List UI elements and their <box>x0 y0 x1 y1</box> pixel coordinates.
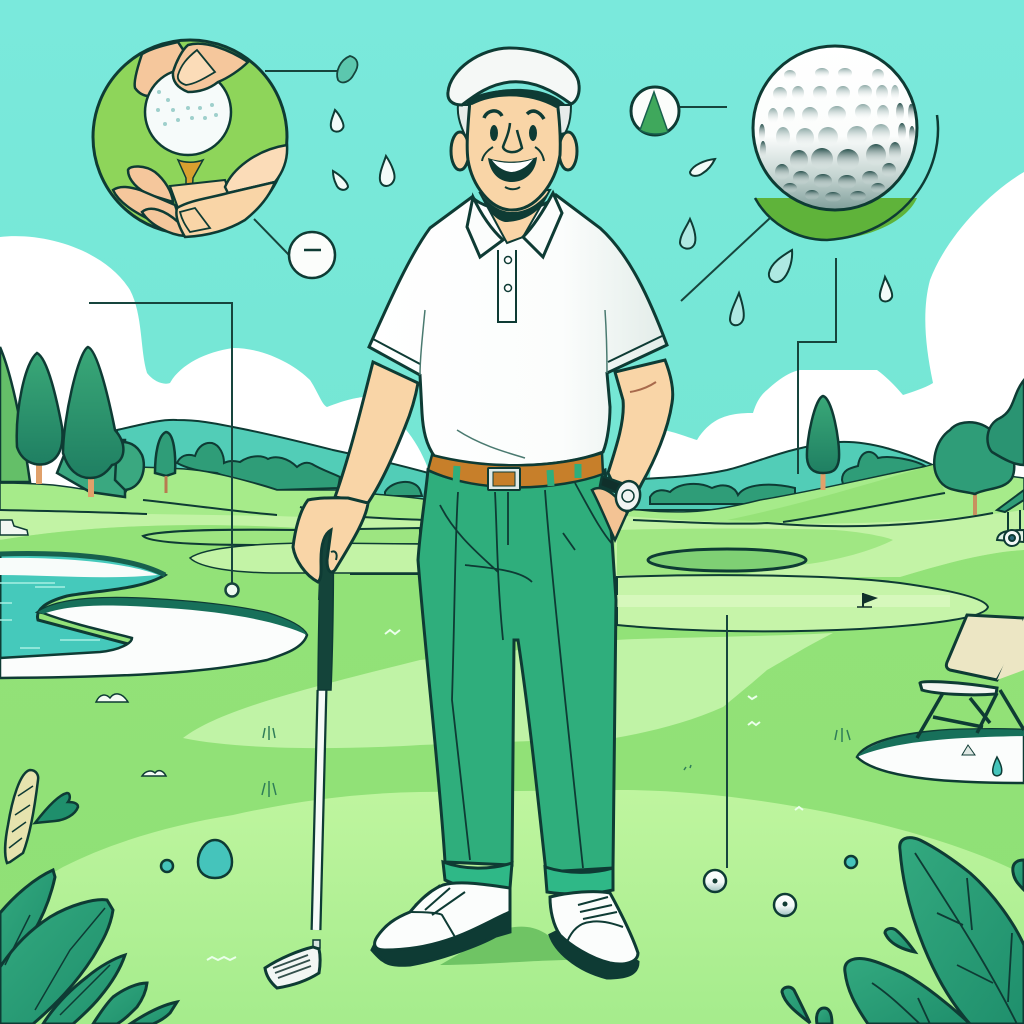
shoe shadow <box>440 927 570 965</box>
inset: hand with tee and ball <box>93 40 287 237</box>
man <box>293 0 673 978</box>
callout connector and marker: minus circle <box>254 219 335 278</box>
bottom green <box>0 790 1024 1024</box>
callout line: right lower <box>726 615 728 868</box>
sleeve hems <box>373 336 662 364</box>
foreground leaves: bottom left <box>0 870 177 1024</box>
back green patch right <box>617 528 893 575</box>
shirt <box>369 195 667 466</box>
trees: left group <box>0 347 175 497</box>
sleeve creases <box>420 310 607 458</box>
golf balls on grass <box>704 870 796 916</box>
lower thumbnail <box>180 208 210 232</box>
water drops: left <box>331 110 395 190</box>
distant hills: left <box>117 420 432 510</box>
clouds: right <box>640 172 1024 510</box>
tree badge <box>631 87 727 135</box>
wristwatch <box>600 476 642 513</box>
distant hills: right <box>625 442 935 510</box>
ball dimples upper <box>768 68 899 148</box>
smile lines <box>482 147 544 189</box>
placket <box>498 250 516 322</box>
fingers holding ball <box>135 42 190 96</box>
trees: right group <box>807 380 1024 515</box>
ball dimples lower <box>759 103 915 202</box>
trouser cuffs <box>443 862 512 890</box>
ball on tee <box>145 69 231 155</box>
ears <box>451 132 469 170</box>
sand trap back right <box>648 549 806 571</box>
folding chair <box>917 615 1024 738</box>
flag <box>857 593 878 607</box>
nose <box>503 123 522 152</box>
water drops: right <box>680 159 892 325</box>
golf cart left <box>0 520 28 535</box>
belt <box>428 453 603 487</box>
fairway middle <box>183 633 833 748</box>
pond <box>0 554 165 660</box>
trouser creases <box>440 483 613 868</box>
collar <box>467 197 503 257</box>
left shoe <box>372 883 510 965</box>
feather plant: left <box>5 770 78 863</box>
hair <box>458 105 571 137</box>
left arm <box>335 362 418 503</box>
fairway lines <box>0 493 993 526</box>
golf cart right <box>997 490 1024 546</box>
small mounds <box>96 694 166 776</box>
flat cap <box>448 48 579 105</box>
callout line: left vertical <box>89 303 238 596</box>
right back fairway <box>615 510 1024 577</box>
foreground leaves: bottom right <box>782 838 1024 1024</box>
back greens left <box>143 528 420 545</box>
eyebrows <box>484 111 544 119</box>
sand bunker left <box>0 598 307 678</box>
right leaf veins <box>872 853 1017 1024</box>
cap underside <box>466 89 565 108</box>
diagonal callout line <box>681 218 770 301</box>
right arm <box>608 360 673 513</box>
clouds: left <box>0 236 432 490</box>
large golf ball <box>753 46 938 240</box>
jaw shadow <box>480 190 550 222</box>
grass tufts <box>262 726 850 797</box>
trousers <box>418 470 616 872</box>
golf club <box>265 523 333 988</box>
neck <box>480 190 550 243</box>
callout line: right bracket <box>798 258 836 474</box>
support arc <box>755 115 938 240</box>
eyes <box>490 125 537 141</box>
white grass marks <box>207 630 803 960</box>
light fairway band left <box>0 510 430 540</box>
face <box>467 91 560 210</box>
lower fingers <box>128 166 173 202</box>
hand in pocket <box>592 488 627 540</box>
slope: upper right <box>727 465 945 522</box>
palm behind tee <box>170 180 230 208</box>
tee <box>178 160 203 198</box>
distant bushes <box>177 443 925 504</box>
thumbnail <box>178 50 215 85</box>
teal marks on grass <box>161 757 1002 878</box>
hand on club <box>293 498 368 600</box>
sand bunker right <box>857 729 1024 783</box>
lower rough <box>0 525 1024 1024</box>
putting green right <box>617 575 988 631</box>
grass under ball <box>755 198 917 240</box>
right shoe <box>550 892 638 978</box>
mouth <box>488 157 537 182</box>
club head <box>265 947 320 988</box>
course ground base <box>0 465 1024 1024</box>
callout connector and marker: top drop <box>265 56 357 82</box>
